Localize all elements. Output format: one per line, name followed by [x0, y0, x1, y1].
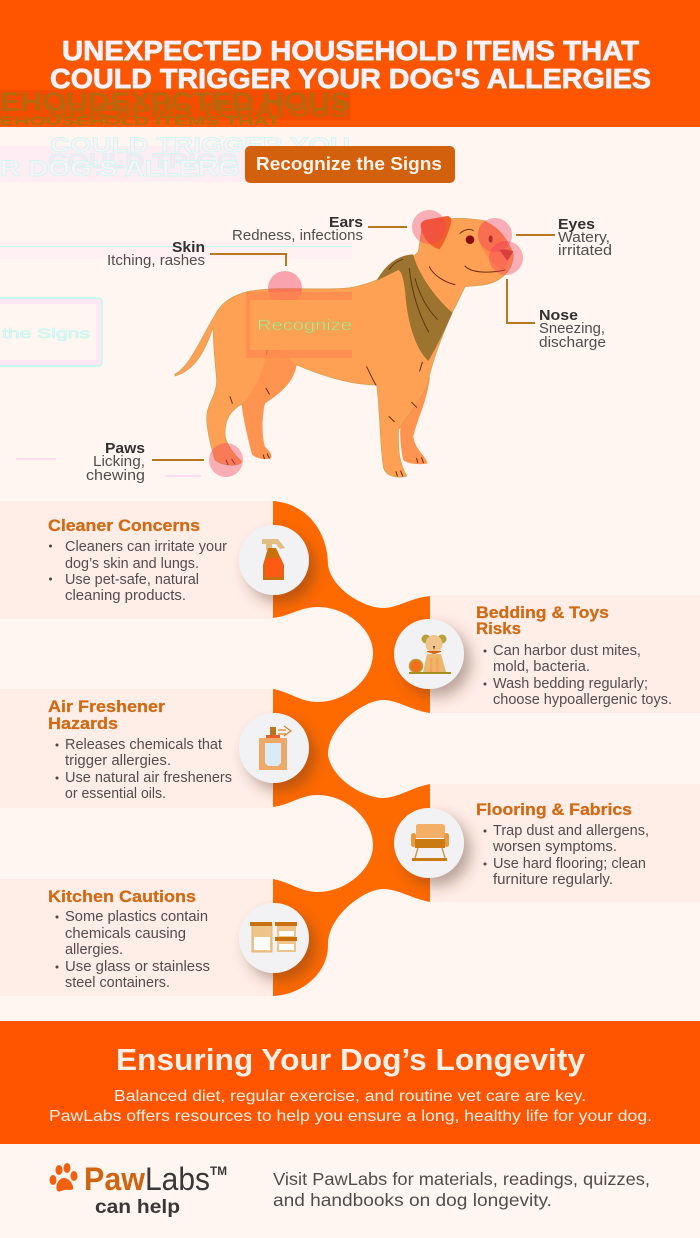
- orange winding ribbon: [273, 501, 430, 996]
- icon: food containers: [239, 903, 309, 973]
- compression ghost: header text fragments: [0, 87, 350, 128]
- panel: bedding and toys risks: Can harbor dust mites,: [493, 643, 641, 659]
- footer text: [273, 1169, 650, 1210]
- panel: bedding and toys risks: Wash bedding regularly;: [493, 676, 648, 692]
- eye patch: [478, 222, 513, 270]
- connector: ears: [368, 226, 407, 228]
- panel: bedding and toys risks: [476, 603, 672, 708]
- panel: air freshener hazards: [48, 697, 232, 802]
- label: nose: [539, 307, 606, 351]
- compression ghost: pale text fragments: COULD TRIGG: [48, 150, 238, 173]
- ear: [421, 216, 451, 249]
- compression ghost: text over dog: Recognize: [257, 317, 352, 334]
- section button: Recognize the Signs: Recognize the Signs: [256, 153, 442, 174]
- panel: flooring and fabrics: Flooring & Fabrics: [476, 800, 632, 819]
- footer text: and handbooks on dog longevity.: [273, 1190, 552, 1210]
- compression ghost: pale text fragments: COULD TRIGGER YOU: [50, 134, 350, 157]
- panel: kitchen cautions: [48, 887, 210, 991]
- panel: cleaner concerns: Use pet-safe, natural: [65, 572, 199, 588]
- icon: paw print: [50, 1163, 78, 1192]
- label: paws: chewing: [86, 468, 145, 484]
- label: ears: [232, 214, 363, 244]
- label: skin: Skin: [172, 239, 205, 256]
- connector: skin: [210, 254, 286, 266]
- header banner: [0, 0, 700, 127]
- panel: bedding and toys risks: Risks: [476, 619, 521, 638]
- compression ghost: header text fragments: EHOUSEHOLD ITEMS THAT: [0, 114, 281, 128]
- panel: flooring and fabrics: Use hard flooring; clean: [493, 856, 646, 872]
- label: paws: Licking,: [93, 454, 145, 470]
- panel: kitchen cautions: allergies.: [65, 942, 123, 958]
- panel: kitchen cautions: steel containers.: [65, 975, 170, 991]
- rear thigh shading: [243, 340, 297, 403]
- title: COULD TRIGGER YOUR DOG'S ALLERGIES: [50, 63, 651, 94]
- panel: air freshener hazards: trigger allergies.: [65, 753, 171, 769]
- logo: PawLabs can help: TM: [210, 1164, 227, 1178]
- allergy marker: nose: [489, 241, 523, 275]
- panel: cleaner concerns: Cleaner Concerns: [48, 516, 200, 535]
- panel backgrounds: [0, 501, 700, 996]
- label: ears: Redness, infections: [232, 228, 363, 244]
- label: eyes: [558, 216, 612, 259]
- label: skin: [107, 239, 205, 269]
- panel: air freshener hazards: or essential oils.: [65, 786, 166, 802]
- closing heading: Ensuring Your Dog’s Longevity: [116, 1042, 586, 1077]
- closing text: [49, 1088, 652, 1125]
- compression ghost: button outline at left: the Signs: [2, 325, 90, 341]
- closing text: Balanced diet, regular exercise, and routine vet care are key.: [114, 1088, 586, 1105]
- dog body: [175, 218, 513, 477]
- label: skin: Itching, rashes: [107, 253, 205, 269]
- far rear leg: [240, 365, 297, 459]
- allergy marker: paws: [209, 443, 243, 477]
- panel: flooring and fabrics: Trap dust and allergens,: [493, 823, 649, 839]
- compression ghost: pale text fragments: [0, 134, 350, 182]
- panel: bedding and toys risks: Bedding & Toys: [476, 603, 609, 622]
- panel: air freshener hazards: Releases chemicals that: [65, 737, 222, 753]
- panel: cleaner concerns: dog’s skin and lungs.: [65, 556, 199, 572]
- compression ghost: pale text fragments: R DOG'S ALLERG: [0, 156, 240, 181]
- logo: PawLabs can help: can help: [95, 1197, 180, 1218]
- icon: air freshener: [239, 713, 309, 783]
- panel: bedding and toys risks: choose hypoallergenic toys.: [493, 692, 672, 708]
- section button: Recognize the Signs: [245, 146, 455, 183]
- title: UNEXPECTED HOUSEHOLD ITEMS THAT: [62, 35, 639, 66]
- compression ghost: pale lines near skin and paws: [0, 241, 352, 477]
- connector: eyes: [516, 234, 555, 236]
- icon: armchair: [394, 808, 464, 878]
- far front leg: [400, 377, 430, 464]
- panel: cleaner concerns: cleaning products.: [65, 588, 186, 604]
- panel: cleaner concerns: Cleaners can irritate your: [65, 539, 227, 555]
- label: eyes: irritated: [558, 243, 612, 259]
- compression ghost: header text fragments: EHOUDEXPCTED HOUS: [0, 87, 350, 117]
- panel: cleaner concerns: [48, 516, 227, 604]
- title: [50, 35, 651, 94]
- panel: air freshener hazards: Air Freshener: [48, 697, 165, 716]
- icon: spray bottle: [239, 525, 309, 595]
- label: nose: Nose: [539, 307, 578, 324]
- panel: kitchen cautions: Some plastics contain: [65, 909, 208, 925]
- panel: kitchen cautions: chemicals causing: [65, 926, 186, 942]
- label: nose: Sneezing,: [539, 321, 605, 337]
- label: nose: discharge: [539, 335, 606, 351]
- logo: PawLabs can help: Paw: [84, 1161, 145, 1197]
- panel: air freshener hazards: Use natural air fresheners: [65, 770, 232, 786]
- compression ghost: text over dog: [246, 292, 352, 358]
- connector: nose: [507, 279, 535, 323]
- logo: PawLabs can help: Labs: [145, 1161, 210, 1197]
- panel: kitchen cautions: Kitchen Cautions: [48, 887, 196, 906]
- panel: flooring and fabrics: worsen symptoms.: [492, 839, 617, 855]
- panel: air freshener hazards: Hazards: [48, 714, 118, 733]
- panel: kitchen cautions: Use glass or stainless: [65, 959, 210, 975]
- label: paws: Paws: [105, 440, 145, 457]
- connector: paws: [152, 459, 204, 461]
- icon: puppy with ball: [394, 619, 464, 689]
- allergy marker: ears: [412, 210, 446, 244]
- label: paws: [86, 440, 145, 484]
- panel: bedding and toys risks: mold, bacteria.: [493, 659, 590, 675]
- logo: PawLabs can help: [50, 1161, 227, 1218]
- bandana: [377, 254, 453, 361]
- label: eyes: Watery,: [558, 230, 610, 246]
- label: eyes: Eyes: [558, 216, 595, 233]
- label: ears: Ears: [329, 214, 363, 231]
- closing banner: [0, 1021, 700, 1144]
- facial lines: [226, 229, 505, 476]
- compression ghost: header text fragments: URIEXPMS TEDATOUS: [48, 100, 348, 122]
- eye and nose: [466, 235, 474, 244]
- panel: flooring and fabrics: [476, 800, 649, 888]
- allergy marker: skin: [268, 271, 302, 305]
- panel: flooring and fabrics: furniture regularly.: [493, 872, 613, 888]
- closing text: PawLabs offers resources to help you ensure a long, healthy life for your dog.: [49, 1108, 652, 1125]
- dog illustration: [175, 216, 513, 477]
- allergy marker: eyes: [478, 218, 512, 252]
- compression ghost: button outline at left: [0, 298, 102, 366]
- footer text: Visit PawLabs for materials, readings, quizzes,: [273, 1169, 650, 1189]
